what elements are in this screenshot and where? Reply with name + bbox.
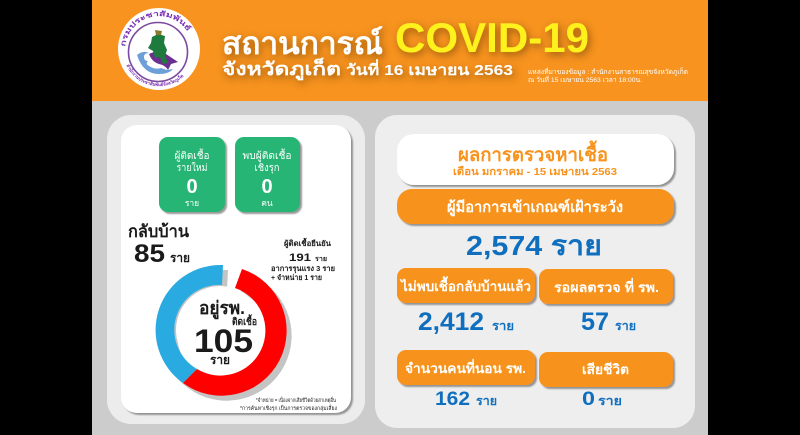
donut centre label: ติดเชื้อ — [232, 314, 257, 328]
header banner — [92, 0, 708, 101]
box: inpatients: จำนวนคนที่นอน รพ. — [405, 358, 526, 376]
stat: returned home: 85 — [134, 240, 165, 268]
card: new cases: 0 — [186, 176, 198, 198]
logo ring text: สำนักงานประชาสัมพันธ์จังหวัดภูเก็ต — [126, 64, 184, 86]
donut centre label: ราย — [210, 353, 230, 367]
stat: 2,412: ราย — [492, 319, 514, 333]
card: proactive cases — [235, 137, 300, 212]
title: situation: สถานการณ์ — [222, 26, 383, 61]
stat: 57 — [581, 308, 636, 336]
logo: provincial public relations seal — [118, 8, 200, 90]
stat: returned home — [128, 222, 190, 268]
stat: confirmed cases — [271, 237, 335, 282]
card: proactive cases: คน — [261, 198, 273, 208]
stat: confirmed cases: อาการรุนแรง 3 ราย — [271, 264, 335, 273]
stat: confirmed cases: + จำหน่าย 1 ราย — [271, 273, 322, 282]
footnotes — [240, 396, 337, 412]
donut segment: returned home — [156, 265, 223, 383]
data source note: แหล่งที่มาของข้อมูล : สำนักงานสาธารณสุขจังหวัดภูเก็ต — [528, 67, 688, 76]
page background — [92, 0, 708, 435]
stat: 162: ราย — [476, 394, 497, 408]
box: inpatients — [397, 350, 535, 385]
results heading — [397, 134, 674, 185]
panel: left hospital summary — [107, 115, 365, 424]
logo ring text — [122, 10, 193, 86]
subtitle: province: จังหวัดภูเก็ต — [222, 57, 341, 81]
stat: returned home: ราย — [170, 251, 190, 265]
card: new cases: ราย — [185, 198, 199, 208]
card: proactive cases: พบผู้ติดเชื้อ — [242, 148, 292, 162]
stat: 162 — [435, 389, 497, 410]
box: awaiting results — [539, 269, 673, 304]
data source note: ณ วันที่ 15 เมษายน 2563 เวลา 18:00น. — [528, 75, 642, 84]
box: negative and home — [397, 268, 535, 303]
stat: returned home: กลับบ้าน — [128, 222, 189, 241]
data source note — [528, 67, 688, 84]
box: deaths: เสียชีวิต — [582, 362, 629, 377]
donut centre label: 105 — [194, 323, 253, 359]
stat: confirmed cases: ราย — [315, 256, 327, 263]
stat: 57: 57 — [581, 308, 609, 336]
card: new cases: รายใหม่ — [176, 162, 208, 174]
card: new cases: ผู้ติดเชื้อ — [174, 148, 210, 162]
box: negative and home: ไม่พบเชื้อกลับบ้านแล้ว — [399, 276, 531, 294]
stat: confirmed cases: ผู้ติดเชื้อยืนยัน — [284, 237, 332, 249]
stat: 0 deaths — [582, 389, 622, 410]
panel: right test results — [375, 115, 695, 428]
card: proactive cases: เชิงรุก — [254, 163, 280, 174]
footnotes: *การค้นหาเชิงรุก เป็นการตรวจของกลุ่มเสี่ยง — [240, 404, 337, 412]
banner: patients under investigation: ผู้มีอาการเข้าเกณฑ์เฝ้าระวัง — [447, 198, 623, 217]
subtitle: date: วันที่ 16 เมษายน 2563 — [346, 59, 513, 79]
donut chart: patient distribution — [156, 265, 292, 401]
results heading: ผลการตรวจหาเชื้อ — [458, 140, 608, 166]
stat: 57: ราย — [615, 319, 636, 333]
stat: 2,412: 2,412 — [418, 308, 484, 336]
title: COVID-19: COVID-19 — [395, 14, 589, 61]
donut centre label: อยู่รพ. — [199, 298, 245, 320]
footnotes: *จำหน่าย = เนื่องจากเสียชีวิตด้วยสาเหตุอื่น — [256, 396, 336, 404]
stat: 2,412 — [418, 308, 514, 336]
stat: 0 deaths: 0 — [582, 389, 595, 410]
stat: 2,574: 2,574 ราย — [466, 230, 602, 261]
card: new cases — [159, 137, 225, 212]
box: awaiting results: รอผลตรวจ ที่ รพ. — [554, 277, 659, 295]
banner: patients under investigation — [397, 189, 674, 224]
stat: 162: 162 — [435, 389, 470, 410]
donut centre label — [194, 298, 257, 367]
donut segment: in hospital — [183, 269, 287, 396]
stat: confirmed cases: 191 — [289, 252, 311, 264]
stat: 0 deaths: ราย — [598, 394, 622, 408]
box: deaths — [539, 352, 673, 387]
card: proactive cases: 0 — [261, 176, 273, 198]
logo ring text: กรมประชาสัมพันธ์ — [122, 10, 193, 46]
results heading: เดือน มกราคม - 15 เมษายน 2563 — [453, 165, 617, 178]
